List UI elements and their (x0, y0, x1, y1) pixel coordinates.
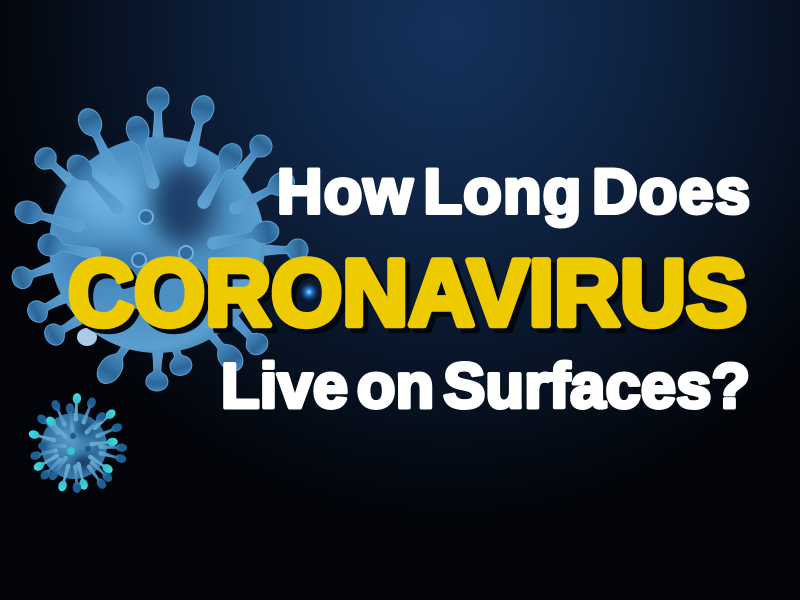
icon: small virus (28, 393, 127, 493)
body lower shading (70, 246, 170, 278)
body shading (151, 163, 215, 247)
spikes behind body (9, 87, 308, 391)
craters (132, 210, 193, 267)
small virus shading (74, 456, 94, 470)
title (68, 157, 752, 422)
small virus craters (67, 447, 75, 455)
small virus body (41, 413, 107, 479)
heading line 1: How Long Does (277, 157, 750, 227)
heading line 2 shadow: CORONAVIRUS (73, 245, 752, 350)
heading line 3: Live on Surfaces? (221, 352, 750, 422)
body highlight (71, 167, 139, 223)
icon: large virus (9, 87, 308, 391)
virus body (49, 137, 265, 353)
heading line 2: CORONAVIRUS (68, 240, 747, 345)
glow inside letter O (299, 282, 319, 302)
small virus spikes (28, 393, 127, 493)
pale bulb (77, 328, 97, 346)
small virus top shading (76, 419, 94, 437)
front spikes (12, 93, 299, 266)
